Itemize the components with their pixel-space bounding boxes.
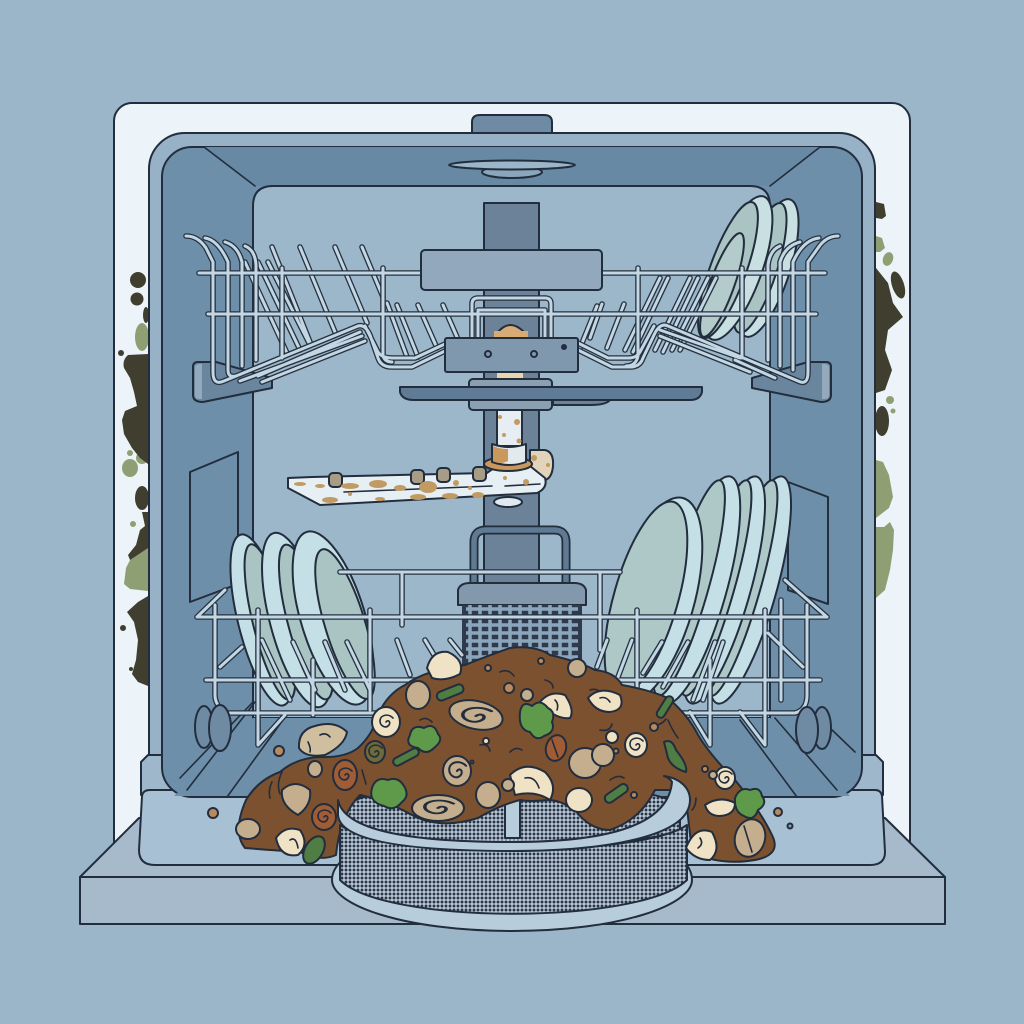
- lower rack: [197, 572, 827, 745]
- door side tabs: [141, 755, 883, 795]
- strainer front wall: [340, 825, 687, 914]
- small crumbs: [208, 658, 792, 828]
- bottom stub: [494, 497, 522, 507]
- flange: [484, 457, 532, 471]
- rusty spray arm: [288, 410, 553, 507]
- rust spots: [294, 415, 550, 503]
- rack roller left: [193, 362, 272, 402]
- green broccoli: [371, 702, 764, 818]
- dishwasher body frame: [114, 103, 910, 873]
- pipe: [497, 410, 522, 446]
- tan pieces: [236, 659, 769, 860]
- back wall: [253, 186, 770, 718]
- arm body: [288, 462, 546, 505]
- rack roller right: [752, 362, 831, 402]
- food pieces: [208, 652, 792, 867]
- food pile: [239, 647, 775, 862]
- door inner panel: [139, 790, 885, 865]
- cream mushroom pieces: [276, 652, 735, 860]
- top latch: [472, 115, 552, 133]
- rack hub plate: [445, 338, 578, 372]
- cutlery basket: [458, 530, 586, 665]
- upper bracket: [421, 250, 602, 290]
- lower plates left: [217, 523, 390, 714]
- olive spiral: [365, 741, 385, 763]
- mid spray shelf: [400, 379, 702, 410]
- open door: [80, 818, 945, 924]
- lower plates right: [586, 469, 808, 713]
- strainer interior mesh: [345, 784, 680, 845]
- spiral details: [318, 708, 732, 822]
- upper plates: [686, 188, 811, 348]
- central column: [484, 203, 539, 603]
- green pills and leaves: [299, 683, 686, 867]
- strainer inner divider: [497, 795, 527, 838]
- end cap: [530, 450, 553, 480]
- dome fitting: [494, 325, 528, 382]
- mold stains left: [118, 272, 149, 686]
- mold stains right: [875, 202, 908, 598]
- side wall panel left: [190, 452, 238, 602]
- tub outer wall: [149, 133, 875, 813]
- ceiling: [204, 147, 820, 186]
- tub floor: [174, 702, 855, 797]
- strainer base ring: [332, 858, 692, 931]
- nozzles: [329, 467, 486, 487]
- vent on ceiling: [449, 160, 575, 178]
- tub interior: [162, 147, 862, 797]
- upper rack tines: [245, 247, 716, 357]
- rust spirals: [312, 733, 569, 830]
- rack wheels: [195, 705, 831, 753]
- side wall panel right: [788, 482, 828, 604]
- collar: [492, 444, 526, 465]
- strainer top rim: [338, 776, 690, 851]
- pile squiggles: [269, 671, 696, 810]
- upper rack: [186, 236, 838, 382]
